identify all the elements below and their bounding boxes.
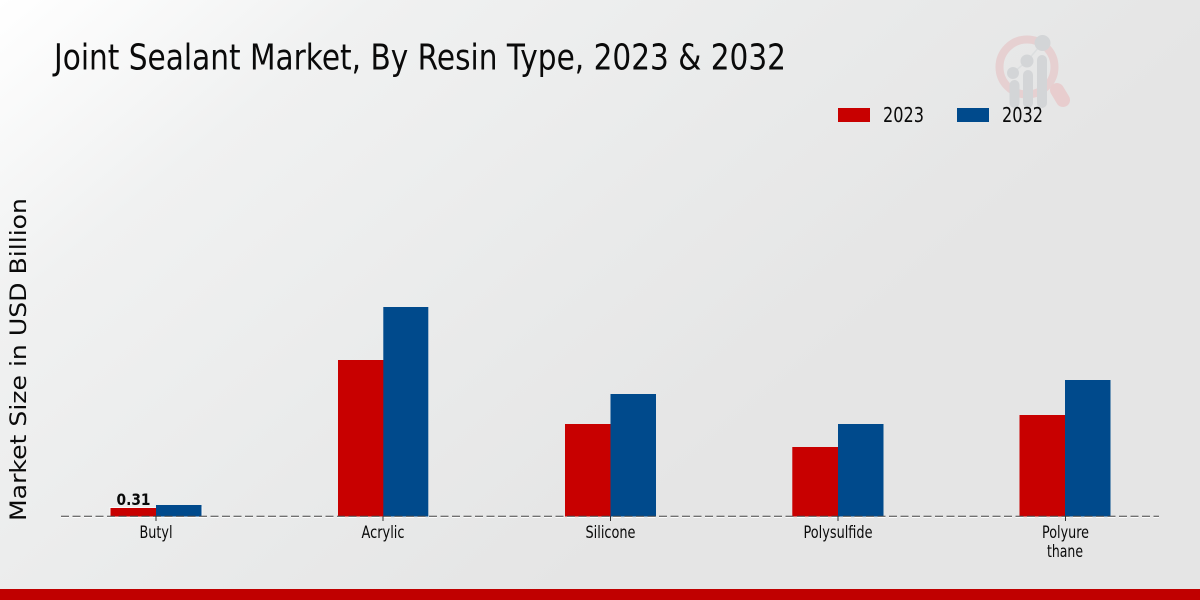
category label: Butyl: Butyl: [140, 523, 172, 542]
y axis label: Market Size in USD Billion: [6, 198, 32, 521]
icon: watermark logo: [1000, 35, 1063, 108]
legend item: 2023: [838, 103, 924, 127]
category label: Polyurethane: [1042, 523, 1089, 561]
legend item: 2032: [957, 103, 1043, 127]
bars: Polysulfide: [792, 424, 884, 516]
bars: Silicone: [565, 394, 656, 516]
category label: Acrylic: Acrylic: [362, 523, 404, 542]
bars: Acrylic: [338, 307, 428, 516]
category label: Polysulfide: Polysulfide: [804, 523, 872, 542]
data label: 0.31: 0.31: [116, 490, 150, 509]
footer bar: [0, 589, 1200, 600]
title: Joint Sealant Market, By Resin Type, 2023 & 2032: [52, 38, 786, 78]
legend: [838, 103, 1043, 127]
category label: Polyurethane: thane: [1047, 542, 1083, 561]
legend item: 2023: 2023: [883, 103, 924, 127]
bars: Polyurethane: [1020, 380, 1110, 516]
bar chart: [61, 307, 1159, 561]
baseline: [61, 516, 1159, 517]
legend item: 2032: 2032: [1002, 103, 1043, 127]
category label: Polyurethane: Polyure: [1042, 523, 1089, 542]
bars: Butyl: [110, 505, 202, 518]
category label: Silicone: Silicone: [586, 523, 636, 542]
